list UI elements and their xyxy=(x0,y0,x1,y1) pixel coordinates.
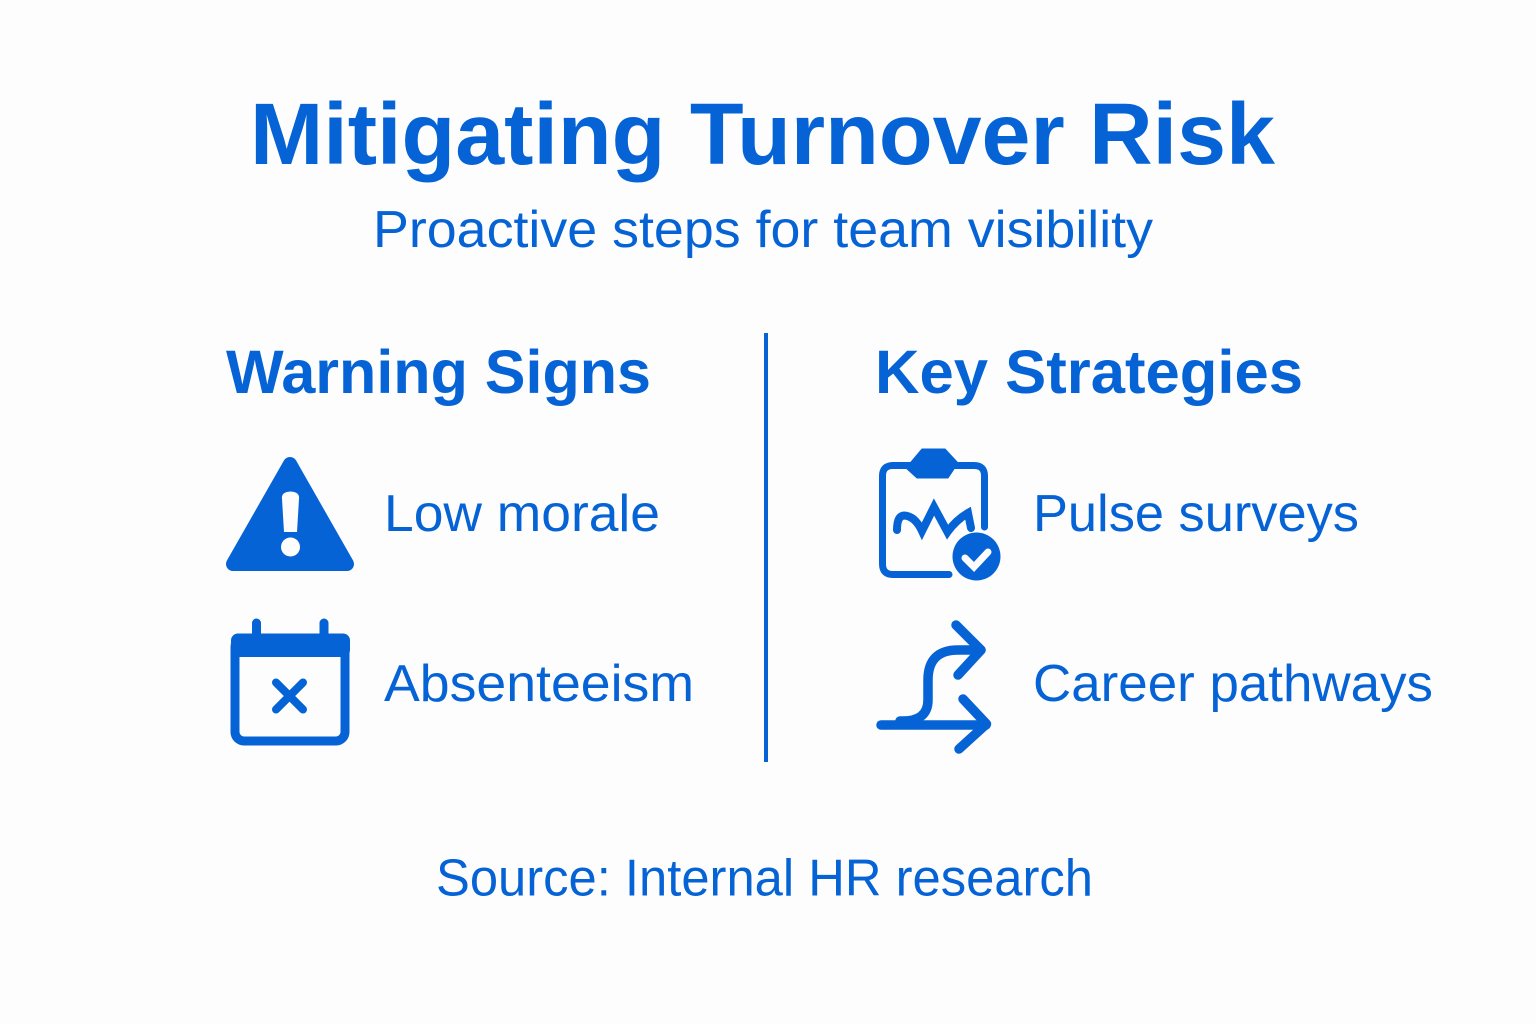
label: pulse surveys: Pulse surveys xyxy=(1033,485,1359,543)
panel: key strategies xyxy=(875,338,1433,749)
heading: key strategies: Key Strategies xyxy=(875,338,1303,406)
panel: warning signs xyxy=(226,338,694,741)
title: Mitigating Turnover Risk xyxy=(250,86,1276,183)
icon: calendar with x xyxy=(231,623,350,741)
icon: warning triangle xyxy=(233,464,347,564)
source note: Source: Internal HR research xyxy=(436,850,1093,908)
center divider xyxy=(764,333,768,762)
subtitle: Proactive steps for team visibility xyxy=(373,201,1153,259)
icon: clipboard survey xyxy=(882,449,1000,580)
icon: career pathway arrows xyxy=(881,625,986,749)
label: career pathways: Career pathways xyxy=(1033,655,1433,713)
heading: warning signs: Warning Signs xyxy=(226,338,651,406)
label: absenteeism: Absenteeism xyxy=(384,655,694,713)
label: low morale: Low morale xyxy=(384,485,660,543)
